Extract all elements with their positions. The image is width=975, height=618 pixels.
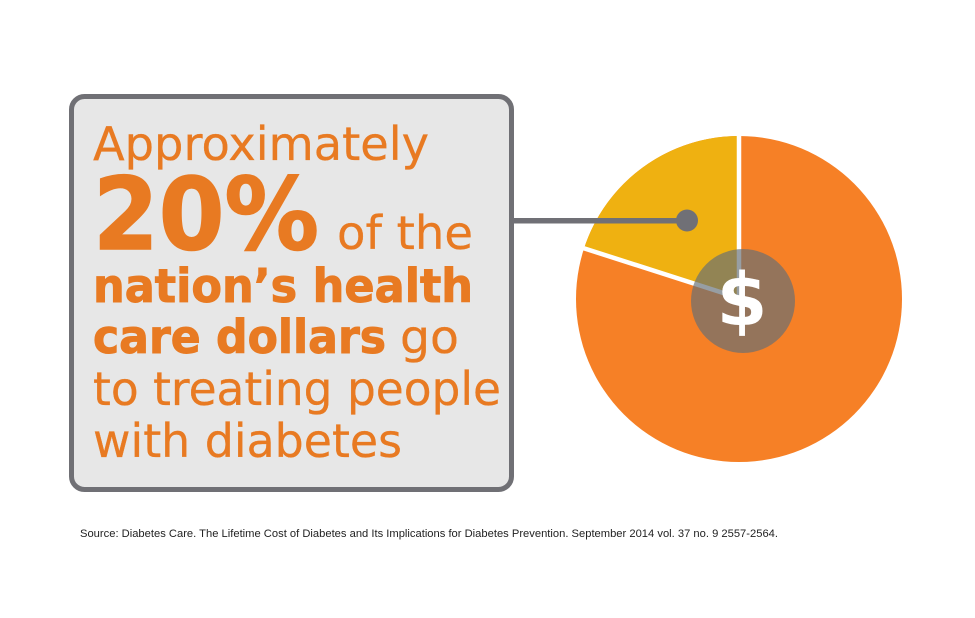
icon: dollar sign: $ — [717, 258, 767, 343]
text: care dollars: care dollars — [93, 310, 386, 364]
pie chart — [576, 135, 902, 462]
callout panel — [72, 96, 512, 490]
big stat: 20%: 20% — [93, 156, 319, 273]
pie slice: remaining 80% — [576, 136, 902, 462]
text: to treating people: to treating people — [93, 362, 501, 416]
text: with diabetes: with diabetes — [93, 414, 402, 468]
text: of the: of the — [337, 206, 473, 260]
connector line — [513, 210, 698, 232]
text: nation's health: nation’s health — [93, 259, 473, 313]
centre circle — [691, 249, 795, 353]
text: go: go — [400, 310, 459, 364]
pie slice: diabetes 20% — [584, 136, 739, 299]
source note: Source: Diabetes Care. The Lifetime Cost of Diabetes and Its Implications for Diabetes Prevention. September 2014 vol. 37 no. 9 2557-2564. — [80, 528, 778, 540]
heading: Approximately: Approximately — [93, 117, 429, 171]
slice dividers — [583, 135, 739, 298]
